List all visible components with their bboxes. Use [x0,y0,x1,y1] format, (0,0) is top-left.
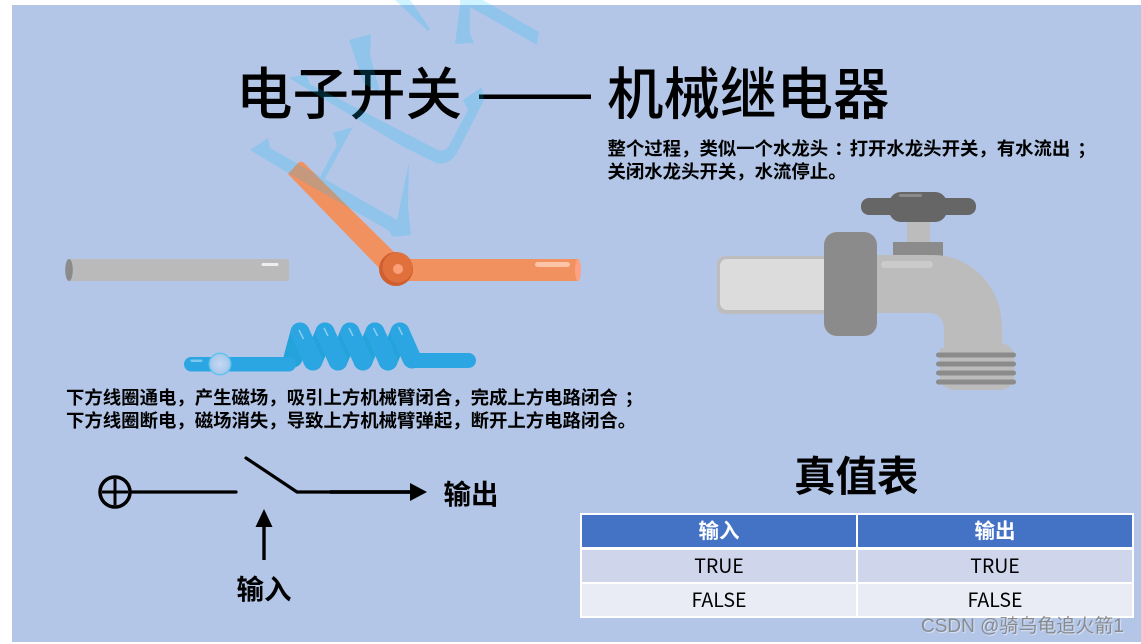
raised arm [288,162,396,269]
title [236,49,890,131]
relay armature: orange arm and hinge [288,162,581,286]
input wire [130,490,236,494]
faucet flange [893,242,943,257]
row: TRUE: TRUE [970,550,1020,579]
row: FALSE: FALSE [691,584,747,613]
hinge [379,252,413,286]
relay contact: fixed gray bar [65,259,289,281]
relay coil [184,327,476,375]
power source symbol [100,477,130,507]
output label: 输出 [444,472,498,512]
faucet stem [907,222,930,243]
icon: faucet [717,192,1016,390]
row: TRUE: TRUE [694,550,744,579]
text block: faucet analogy: 关闭水龙头开关，水流停止。 [608,158,847,184]
coil terminal [209,353,231,375]
header row: 输入 [698,514,740,544]
row: FALSE [582,584,1132,616]
CSDN source watermark: CSDN @骑乌龟追火箭1 [921,616,1124,637]
faucet spout body [870,255,1014,390]
text block: coil explanation: 下方线圈断电，磁场消失，导致上方机械臂弹起，断开上方电路闭合。 [66,407,636,433]
input arrow [256,509,272,560]
input label: 输入 [236,567,292,607]
text block: coil explanation [66,384,643,433]
truth table heading: 真值表 [794,443,919,503]
text block: coil explanation: 下方线圈通电，产生磁场，吸引上方机械臂闭合，完成上方电路闭合 ； [66,384,643,410]
faucet inlet pipe [717,256,832,314]
translucent background watermark strokes [250,0,539,237]
title: 机械继电器 [607,49,890,131]
faucet collar [824,232,877,336]
faucet handle [861,192,976,222]
truth table [580,513,1134,618]
circuit switch diagram [100,458,498,607]
row: TRUE [582,550,1132,582]
title: 电子开关 [236,49,462,131]
text block: faucet analogy [608,135,1096,184]
header row: 输出 [974,514,1016,544]
output arrow [297,483,427,501]
coil left lead [184,357,296,372]
text block: faucet analogy: 整个过程，类似一个水龙头 ：打开水龙头开关，有水流出 ； [608,135,1096,161]
horizontal arm [396,259,578,281]
coil right lead [405,353,476,368]
header row [582,514,1132,547]
row: FALSE: FALSE [967,584,1023,613]
spout threads [936,352,1016,384]
coil highlights [299,327,402,339]
coil front strokes [300,332,412,361]
coil back strokes [293,332,400,361]
switch blade [246,458,297,492]
spout highlight [881,261,933,268]
